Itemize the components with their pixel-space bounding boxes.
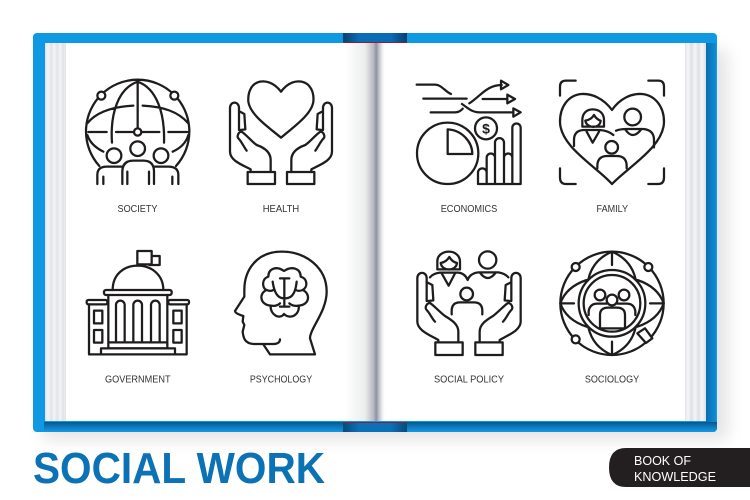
- icon: social policy: [417, 251, 521, 355]
- top spine band: [343, 33, 407, 43]
- label: psychology: PSYCHOLOGY: [250, 374, 312, 386]
- bottom cover side: [44, 422, 717, 432]
- badge: book of knowledge: [609, 448, 750, 487]
- icon: health: [230, 81, 332, 184]
- icon: government: [87, 251, 189, 354]
- left page edges: [45, 43, 66, 421]
- book pages: [45, 43, 706, 421]
- icon: economics: $: [482, 120, 490, 136]
- label: family: FAMILY: [597, 204, 628, 215]
- label: sociology: SOCIOLOGY: [585, 374, 639, 386]
- right page edges: [685, 43, 706, 421]
- badge: book of knowledge: KNOWLEDGE: [634, 469, 716, 484]
- gutter shadow: [345, 43, 385, 421]
- right cover side: [706, 43, 717, 432]
- badge: book of knowledge: BOOK OF: [634, 453, 691, 468]
- book cover: [33, 33, 717, 432]
- bottom spine band: [343, 422, 407, 432]
- icon: sociology: [560, 252, 664, 355]
- label: social policy: SOCIAL POLICY: [434, 374, 504, 386]
- label: society: SOCIETY: [118, 204, 158, 215]
- label: government: GOVERNMENT: [105, 374, 171, 386]
- title: SOCIAL WORK: [33, 444, 325, 493]
- book shadow: [42, 50, 728, 440]
- icon: family: [560, 81, 664, 184]
- icon: society: [86, 80, 189, 184]
- label: health: HEALTH: [263, 204, 299, 215]
- icon: economics: [417, 81, 521, 184]
- label: economics: ECONOMICS: [441, 204, 498, 215]
- icon: psychology: [235, 252, 327, 354]
